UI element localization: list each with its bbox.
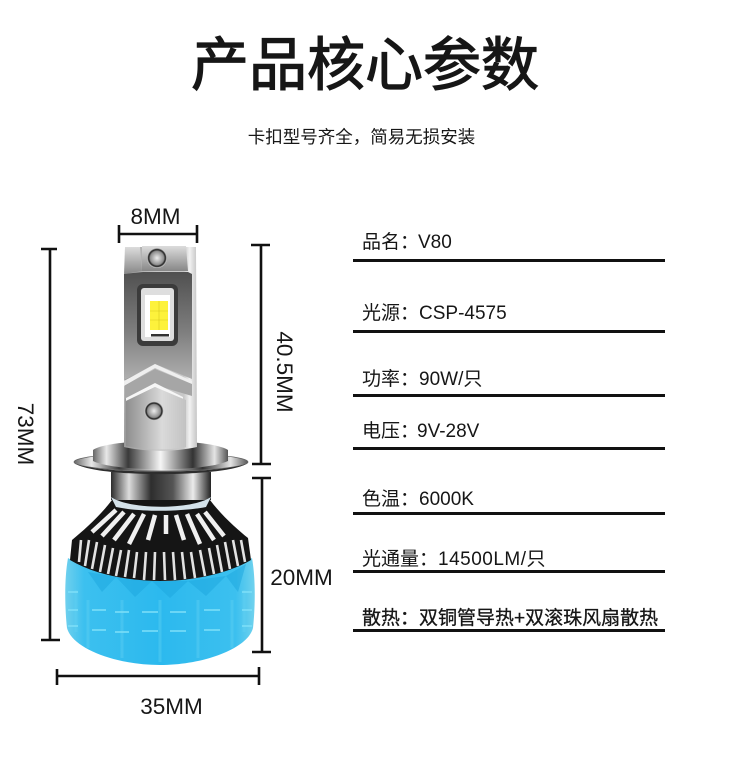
bulb: blue base <box>65 558 255 665</box>
subtitle: 卡扣型号齐全，简易无损安装 <box>248 127 475 147</box>
spec row: luminous flux <box>353 548 665 573</box>
spec row: colour temperature: 色温： <box>362 488 419 510</box>
spec row: luminous flux: 14500LM/只 <box>438 549 546 570</box>
dimension: 40.5MM head height: 40.5MM <box>272 331 297 413</box>
bulb: mounting flange <box>74 441 248 474</box>
spec row: product name: 品名： <box>362 231 419 253</box>
spec row: light source: CSP-4575 <box>419 303 507 324</box>
dimension: 20MM base height <box>252 478 333 652</box>
spec row: power <box>353 368 665 397</box>
dimension: 8MM width <box>119 204 197 243</box>
spec row: product name <box>353 231 665 262</box>
dimension: 35MM base width <box>57 667 259 719</box>
dimension: 35MM base width: 35MM <box>140 694 203 719</box>
spec row: power: 90W/只 <box>419 369 482 390</box>
spec row: product name: V80 <box>418 232 452 253</box>
LED bulb illustration <box>65 246 255 665</box>
dimension: 73MM total height <box>13 249 60 640</box>
spec row: light source: 光源： <box>362 302 419 324</box>
bulb: metal stem <box>124 246 197 451</box>
title: 产品核心参数 <box>191 33 539 98</box>
spec row: voltage: 9V-28V <box>417 421 480 442</box>
dimension: 40.5MM head height <box>251 245 297 464</box>
bulb: neck <box>111 472 211 511</box>
icon: top screw <box>147 248 167 268</box>
spec row: colour temperature: 6000K <box>419 489 474 510</box>
spec row: voltage: 电压： <box>362 420 419 442</box>
spec row: voltage <box>353 420 665 450</box>
spec row: light source <box>353 302 665 333</box>
icon: lower screw <box>144 402 164 420</box>
spec row: colour temperature <box>353 488 665 515</box>
dimension: 20MM base height: 20MM <box>270 565 333 590</box>
spec row: heat dissipation <box>353 607 665 632</box>
spec row: power: 功率： <box>362 368 419 390</box>
spec row: heat dissipation: 散热： <box>362 607 419 629</box>
bulb: heat-sink fins <box>70 500 251 581</box>
spec row: luminous flux: 光通量： <box>362 548 438 570</box>
dimension: 8MM width: 8MM <box>130 204 180 229</box>
LED chip <box>137 284 178 346</box>
dimension: 73MM total height: 73MM <box>13 403 38 465</box>
spec row: heat dissipation: 双铜管导热+双滚珠风扇散热 <box>419 607 658 629</box>
